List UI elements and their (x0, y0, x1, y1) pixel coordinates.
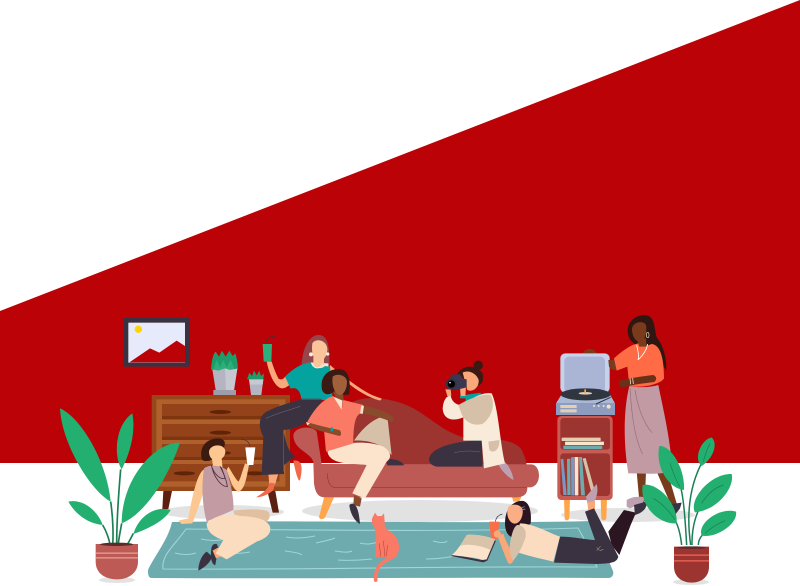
floor shadows (99, 500, 709, 585)
standing woman in orange top and mauve skirt (608, 315, 682, 515)
green cup (263, 336, 275, 362)
cabinet (557, 416, 613, 500)
cat (372, 513, 399, 580)
woman photographer with camera (429, 361, 513, 480)
drink (489, 514, 502, 539)
woman sitting on floor with white cup (178, 438, 270, 571)
picture frame (123, 318, 190, 367)
woman with green drink sitting on sofa arm (256, 335, 382, 497)
rug (148, 521, 613, 578)
hand behind record player lid (583, 349, 597, 354)
turntable (556, 353, 615, 415)
sofa (293, 398, 539, 519)
red wall (0, 0, 800, 463)
books (561, 438, 604, 495)
open book (451, 535, 496, 562)
potted plant: large grey pot (211, 351, 238, 395)
white cup (242, 439, 255, 465)
back leg (608, 510, 636, 555)
record player on cabinet (556, 353, 615, 520)
camera (446, 374, 467, 390)
woman in coral shirt sitting on sofa (306, 369, 404, 524)
potted plant: small grey pot (247, 371, 264, 395)
dresser (152, 395, 290, 513)
woman lying on rug reading (489, 484, 647, 564)
plant: right leafy plant in pot (642, 437, 736, 583)
cabinet legs (564, 499, 607, 520)
plant: large left leafy plant (60, 408, 180, 579)
